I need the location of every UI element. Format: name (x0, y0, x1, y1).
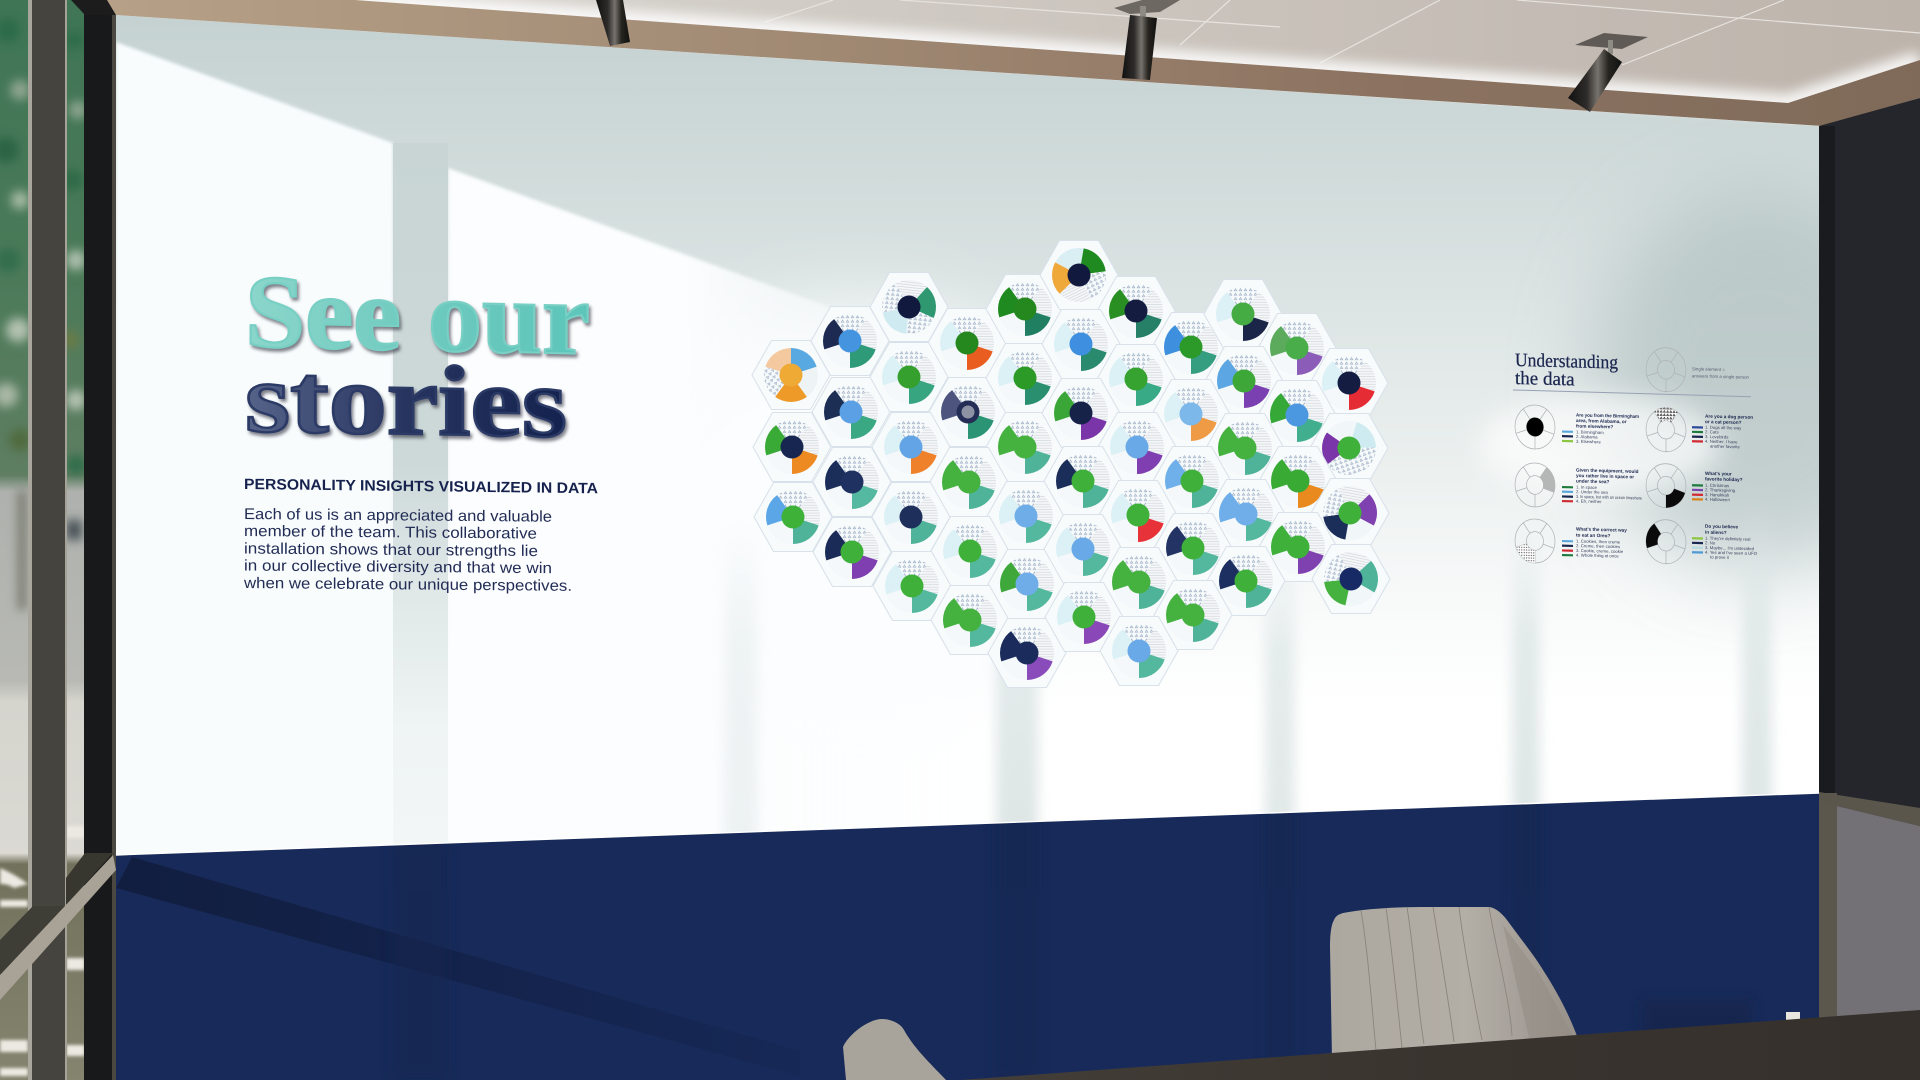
spotlight right (1568, 33, 1648, 112)
power outlet (1786, 1012, 1800, 1021)
hex: green purple navy (1311, 478, 1389, 548)
hex: blue teal (1044, 514, 1122, 584)
question: aliens: in aliens? (1705, 530, 1727, 535)
hex: blue blue teal (1207, 480, 1285, 548)
body paragraph: when we celebrate our unique perspectives. (243, 575, 572, 595)
painted wall (116, 0, 1920, 863)
single element wheel (1646, 347, 1686, 392)
question: dog or cat: Are you a dog person (1705, 414, 1753, 420)
hex: green blue purple (1205, 346, 1283, 416)
hex: green green teal (1100, 548, 1178, 616)
divider (1513, 390, 1751, 397)
question: Oreo: 2. Creme, then cookies (1576, 543, 1620, 549)
far chair (843, 1019, 946, 1080)
near chair (1330, 907, 1577, 1060)
hex: navy teal green (1312, 544, 1390, 614)
question: dog or cat: another favorite (1710, 444, 1740, 449)
question: space or sea: 3. In space, but with an ocean timeshare (1576, 494, 1643, 501)
window frame post (28, 0, 67, 1080)
body paragraph: in our collective diversity and that we win (244, 557, 552, 577)
question: aliens: Do you believe (1705, 524, 1738, 529)
question: Birmingham: 2. Alabama (1576, 434, 1598, 440)
hex: blue teal (1042, 310, 1120, 378)
title: See our stories: stories (245, 342, 567, 459)
hex: navy teal (872, 482, 950, 552)
legend heading: Understanding (1515, 350, 1618, 374)
hex: green green purple (1258, 314, 1336, 382)
hex: navy navy purple (988, 618, 1066, 688)
body paragraph: installation shows that our strengths lie (244, 540, 538, 560)
question: Birmingham: area, from Alabama, or (1576, 418, 1627, 424)
hex: navy green purple (1042, 378, 1120, 448)
title: See our stories: See our (245, 254, 590, 377)
question: Oreo (1515, 518, 1627, 565)
question: Birmingham: from elsewhere? (1576, 423, 1613, 429)
single element caption (1692, 366, 1750, 380)
hex: green teal dark (986, 344, 1064, 412)
hex: green purple (1045, 582, 1123, 652)
question: favorite holiday: 3. Hanukkah (1705, 492, 1730, 498)
question: aliens: to prove it (1710, 554, 1730, 560)
hex: green purple light blue (1310, 414, 1388, 482)
single element caption: Single element = (1692, 366, 1725, 372)
body paragraph: Each of us is an appreciated and valuable (244, 506, 552, 526)
question: Oreo: What's the correct way (1576, 526, 1627, 533)
right dark wall (1819, 98, 1920, 1080)
question: space or sea (1515, 462, 1643, 510)
question: Birmingham: 1. Birmingham (1576, 429, 1604, 435)
question: dog or cat: 4. Neither, I have (1705, 439, 1738, 444)
hex: green green teal (931, 586, 1009, 654)
question: space or sea: 2. Under the sea (1576, 489, 1608, 495)
question: favorite holiday: 2. Thanksgiving (1705, 487, 1736, 493)
hex: green teal (1097, 344, 1175, 414)
hex: dark green (986, 274, 1064, 344)
hex: green navy teal (1207, 546, 1285, 616)
hex: blue navy teal (812, 378, 890, 446)
hex: green blue teal (754, 482, 832, 552)
hex: green teal (873, 552, 951, 620)
spotlight left (596, 0, 630, 46)
question: favorite holiday: 1. Christmas (1705, 483, 1729, 488)
understanding the data legend panel (1513, 344, 1758, 568)
hex: blue teal (987, 482, 1065, 550)
question: space or sea: under the sea? (1576, 478, 1609, 484)
hex: green teal (870, 342, 948, 412)
hex: navy green orange (753, 412, 831, 482)
question: dog or cat (1646, 407, 1753, 454)
hex: blue purple (1098, 412, 1176, 482)
question: dog or cat: 2. Cats (1705, 429, 1719, 435)
legend heading (1515, 350, 1618, 392)
question: favorite holiday: favorite holiday? (1705, 476, 1743, 482)
hex: green teal (986, 412, 1064, 482)
hex: blue orange (872, 412, 950, 482)
table (961, 1010, 1920, 1080)
question: Oreo: 4. Whole thing at once (1576, 552, 1619, 559)
body paragraph (243, 506, 572, 595)
hexagon data installation (752, 239, 1390, 687)
question: aliens: 4. Yes and I've seen a UFO (1705, 550, 1758, 556)
single element caption: answers from a single person (1692, 373, 1750, 380)
question: aliens: 3. Maybe... I'm undecided (1705, 545, 1755, 551)
dark wall frame (71, 0, 116, 1080)
spotlight centre (1114, 0, 1180, 80)
question: dog or cat: 3. Lovebirds (1705, 434, 1728, 440)
hex: navy navy teal (813, 448, 891, 516)
question: Oreo: 3. Cookie, creme, cookie (1576, 548, 1624, 554)
question: Birmingham: Are you from the Birmingham (1576, 412, 1639, 419)
question: favorite holiday: What's your (1705, 471, 1732, 476)
question: Birmingham: 3. Elsewhere (1576, 439, 1601, 444)
hex: green blue teal (1152, 312, 1230, 382)
hex: green blue teal (1153, 446, 1231, 516)
question: Birmingham (1515, 404, 1639, 452)
hex: blue green teal (988, 550, 1066, 618)
window handrail (0, 853, 116, 1000)
hex: light blue orange (1152, 380, 1230, 448)
hex: green green orange (1259, 446, 1337, 516)
hex: green navy (1204, 280, 1282, 348)
window view outside (0, 0, 87, 1080)
hex: navy green teal (1097, 276, 1175, 346)
hex: green green teal (930, 448, 1008, 516)
hex: green green teal (1154, 580, 1232, 650)
question: favorite holiday: 4. Halloween (1705, 497, 1730, 502)
subheading: PERSONALITY INSIGHTS VISUALIZED IN DATA (244, 476, 598, 497)
ceiling (355, 0, 1920, 105)
question: Oreo: 1. Cookies, then creme (1576, 538, 1621, 545)
question: dog or cat: 1. Dogs all the way (1705, 425, 1742, 431)
legend heading: the data (1515, 368, 1575, 390)
hex: green teal (931, 516, 1009, 586)
question: aliens: 2. No (1705, 540, 1716, 546)
hex: orange (752, 337, 830, 413)
hex: blue navy teal (811, 306, 889, 376)
navy wall band (116, 790, 1819, 1080)
wood ceiling trim (107, 0, 1920, 126)
hex: navy red (1310, 348, 1388, 418)
hex: ghost navy (929, 378, 1007, 446)
question: aliens (1646, 519, 1758, 566)
hex: navy green orange (1040, 239, 1118, 311)
title: See our stories (245, 254, 590, 459)
hex: green green teal (1206, 414, 1284, 482)
hex: green navy teal (1154, 514, 1232, 582)
question: space or sea: you rather live in space or (1576, 473, 1634, 479)
hex: green green purple (1259, 512, 1337, 582)
question: space or sea: Given the equipment, would (1576, 467, 1639, 474)
hex: blue teal (1100, 616, 1178, 686)
hex: green navy teal (1044, 446, 1122, 516)
hex: green red (1099, 480, 1177, 550)
question: space or sea: 4. Eh, neither (1576, 498, 1602, 504)
hex: green red-orange (928, 308, 1006, 378)
question: dog or cat: or a cat person? (1705, 419, 1742, 425)
question: aliens: 1. They're definitely real (1705, 536, 1750, 542)
hex: green navy purple (813, 518, 891, 586)
hex: navy centre green right (870, 272, 948, 342)
question: space or sea: 1. In space (1576, 484, 1598, 490)
question: favorite holiday (1646, 463, 1743, 510)
question: Oreo: to eat an Oreo? (1576, 532, 1611, 538)
hex: blue green teal (1258, 380, 1336, 450)
body paragraph: member of the team. This collaborative (244, 523, 537, 543)
